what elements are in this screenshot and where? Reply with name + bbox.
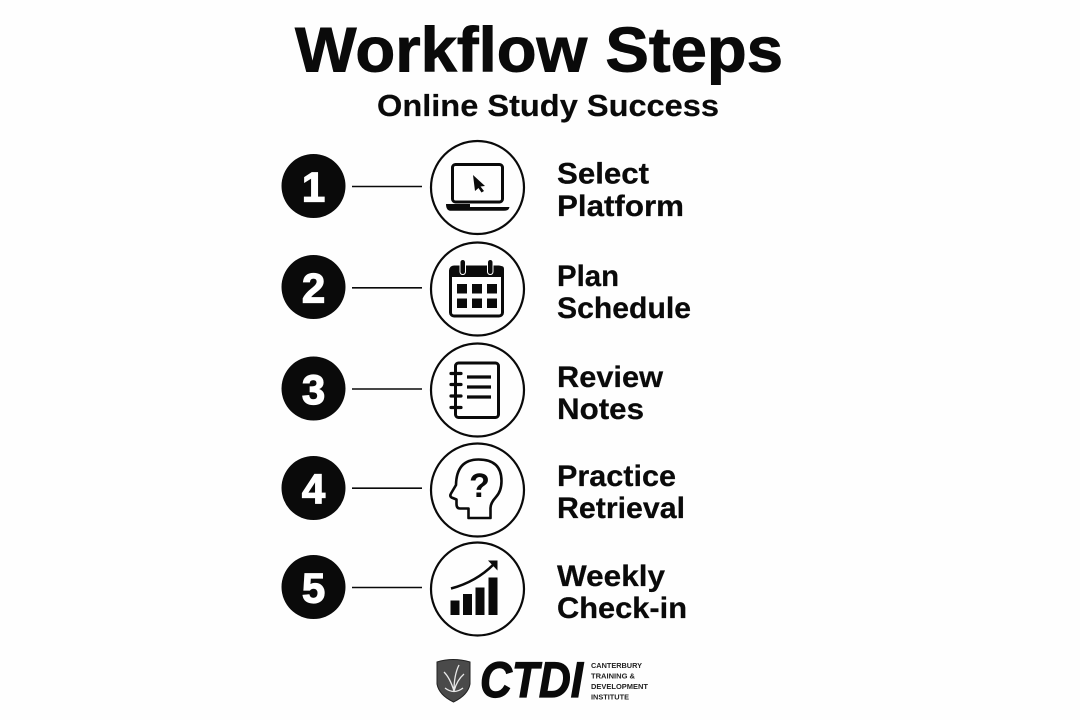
number badge 3: 3	[302, 366, 325, 413]
title: Workflow Steps	[295, 16, 783, 86]
number badge 2	[282, 255, 346, 319]
logo organisation name: TRAINING &	[591, 672, 636, 680]
logo: CTDI	[437, 652, 648, 708]
step 3: review notes	[282, 344, 664, 436]
icon: head with question mark	[431, 444, 524, 536]
step 5: weekly check-in	[282, 542, 687, 636]
connector 5	[352, 586, 422, 588]
logo organisation name: DEVELOPMENT	[591, 682, 648, 691]
label 2	[557, 260, 691, 325]
connector 2	[352, 287, 422, 289]
number badge 1: 1	[302, 164, 325, 210]
number badge 4	[282, 456, 346, 520]
label 1: Select	[557, 158, 649, 190]
logo organisation name	[591, 661, 648, 702]
number badge 2: 2	[302, 264, 325, 312]
number badge 4: 4	[302, 466, 326, 512]
logo wordmark: CTDI	[480, 652, 584, 708]
number badge 1	[282, 154, 346, 218]
number badge 3	[282, 356, 346, 420]
icon: notebook	[431, 344, 524, 436]
logo organisation name: INSTITUTE	[591, 692, 629, 702]
label 5: Weekly	[557, 560, 665, 593]
label 4	[557, 460, 685, 525]
label 1	[557, 158, 684, 223]
label 3	[557, 361, 664, 426]
icon: rising bar chart with arrow	[431, 542, 524, 636]
icon: shield	[437, 660, 470, 702]
label 2: Plan	[557, 260, 619, 293]
icon: head with question mark: ?	[469, 467, 490, 505]
connector 3	[352, 388, 422, 390]
step 1: select platform	[282, 141, 684, 234]
label 3: Review	[557, 361, 664, 394]
step 4: practice retrieval	[282, 444, 685, 536]
label 2: Schedule	[557, 292, 691, 325]
subtitle: Online Study Success	[377, 88, 719, 123]
label 5: Check-in	[557, 592, 687, 625]
logo organisation name: CANTERBURY	[591, 661, 642, 670]
connector 4	[352, 487, 422, 489]
step 2: plan schedule	[282, 242, 691, 336]
number badge 5	[282, 555, 346, 619]
label 5	[557, 560, 687, 625]
connector 1	[352, 186, 422, 188]
icon: calendar	[431, 242, 524, 336]
label 1: Platform	[557, 190, 684, 223]
number badge 5: 5	[302, 564, 325, 612]
label 3: Notes	[557, 393, 644, 426]
label 4: Retrieval	[557, 492, 685, 525]
label 4: Practice	[557, 460, 676, 493]
icon: laptop with cursor	[431, 141, 524, 234]
